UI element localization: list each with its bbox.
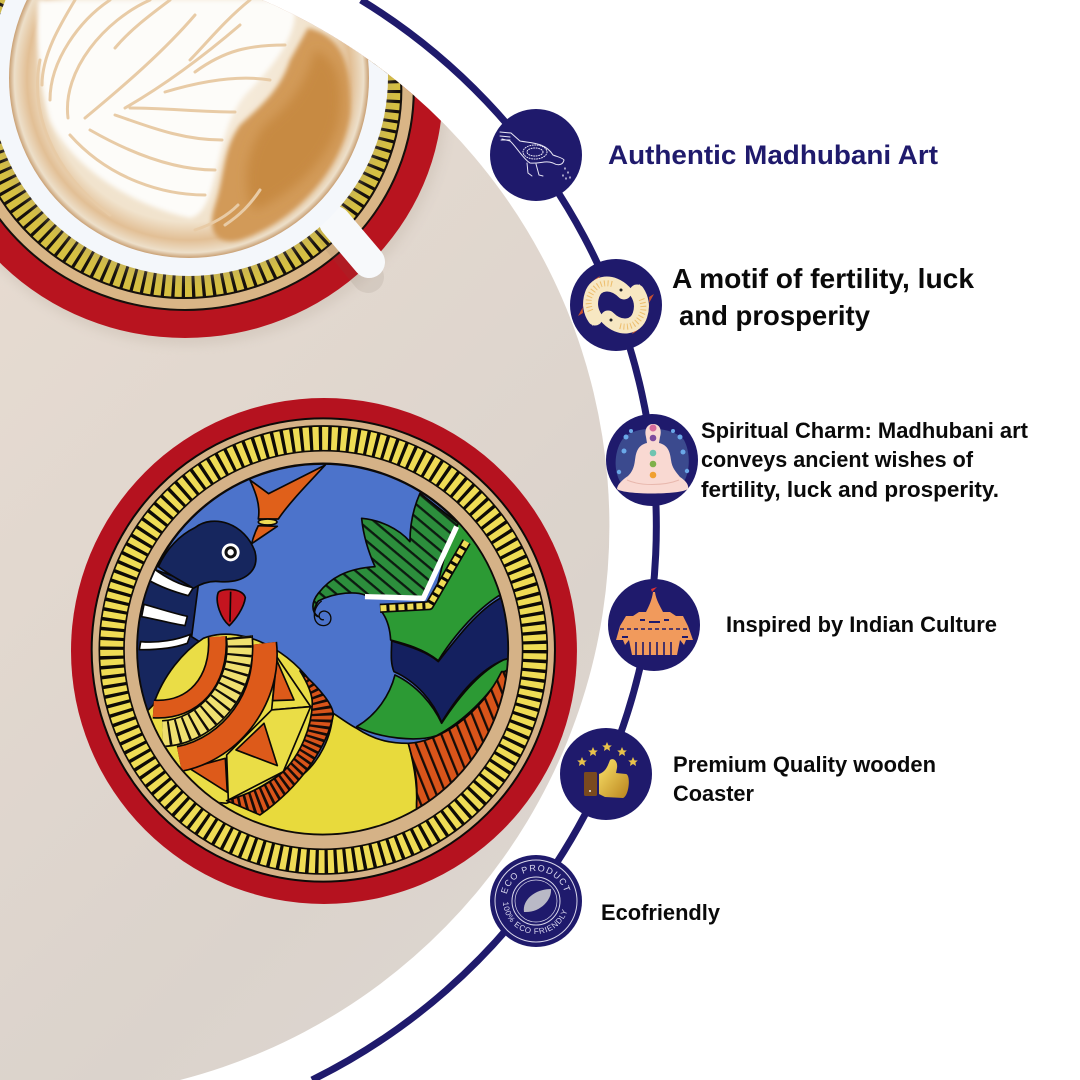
- icon: koi fish: [570, 259, 662, 351]
- text: spiritual charm: [701, 418, 1029, 502]
- main Madhubani coaster: [71, 398, 577, 904]
- icon: eco product stamp: 100% ECO FRIENDLY: [502, 902, 567, 934]
- striped yellow arc: [163, 637, 240, 734]
- latte caramel patch: [212, 28, 350, 241]
- white band: [365, 527, 457, 598]
- latte art fern: [38, 0, 285, 230]
- text: motif of fertility: A motif of fertility, luck: [672, 263, 974, 294]
- yellow ground: [210, 712, 416, 834]
- icon: temple: [608, 579, 700, 671]
- orange arc: [179, 643, 265, 759]
- green striped feather: [313, 493, 458, 617]
- spiral: [314, 601, 331, 626]
- inner orange arc: [153, 637, 218, 709]
- wattle: [217, 589, 245, 626]
- text: authentic Madhubani art: Authentic Madhubani Art: [608, 140, 938, 170]
- text: ecofriendly: Ecofriendly: [601, 900, 721, 925]
- text: spiritual charm: Spiritual Charm: Madhubani art: [701, 418, 1029, 443]
- icon: meditation: [606, 414, 698, 506]
- green lower tail: [356, 658, 507, 740]
- navy chevron: [390, 598, 508, 722]
- text: spiritual charm: fertility, luck and prosperity.: [701, 477, 999, 502]
- orange striped tail: [408, 670, 506, 808]
- icon: thumbs up with stars: [560, 728, 652, 820]
- coffee cup: [0, 0, 390, 281]
- text: premium quality: Coaster: [673, 781, 754, 806]
- triangles: [272, 657, 311, 710]
- lower koi: [608, 284, 654, 334]
- text: premium quality: [673, 752, 936, 806]
- latte white foam: [37, 0, 295, 218]
- dotted yellow band: [380, 542, 467, 608]
- top coaster: [0, 0, 448, 346]
- timeline arc: [312, 0, 656, 1080]
- crest: [250, 465, 325, 519]
- neck white stripes: [148, 568, 193, 596]
- icon: eco product stamp: [490, 855, 582, 947]
- text: spiritual charm: conveys ancient wishes of: [701, 447, 974, 472]
- peacock head: [158, 521, 256, 588]
- upper koi: [578, 276, 624, 326]
- text: motif of fertility: [672, 263, 974, 331]
- peacock neck: [138, 569, 199, 716]
- striped orange crescent: [227, 671, 333, 815]
- beige photo circle with coasters: [0, 0, 610, 1080]
- green tail: [382, 524, 500, 660]
- eye: [222, 543, 240, 561]
- text: premium quality: Premium Quality wooden: [673, 752, 936, 777]
- text: motif of fertility: and prosperity: [679, 300, 870, 331]
- icon: eco product stamp: ECO PRODUCT: [501, 864, 570, 894]
- body: [130, 634, 313, 803]
- text: Indian culture: Inspired by Indian Culture: [726, 612, 997, 637]
- icon: peacock: [490, 109, 582, 201]
